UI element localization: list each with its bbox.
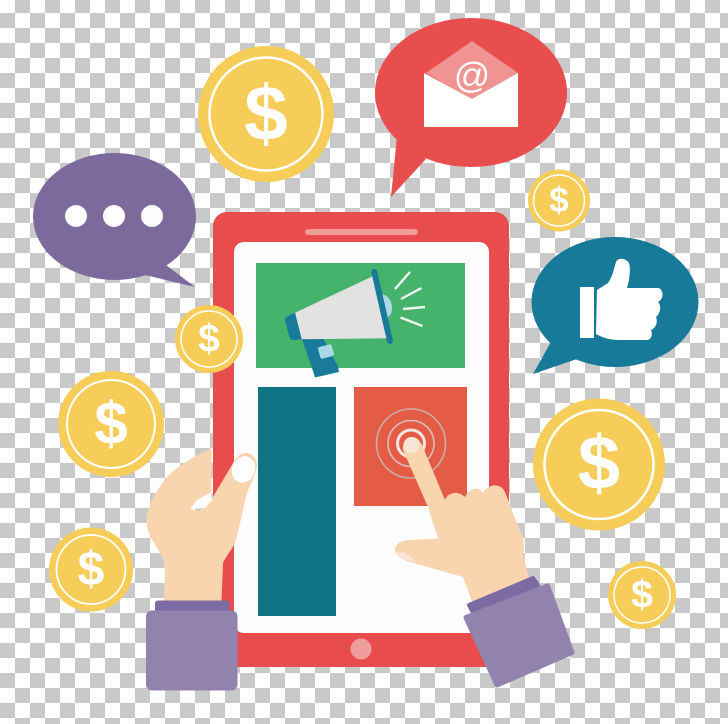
- tablet: [213, 212, 509, 667]
- coin: large right: $: [578, 421, 620, 506]
- coin: bottom left: [49, 528, 133, 612]
- speech bubble: red with email envelope: @: [454, 54, 490, 96]
- coin: bottom right: $: [631, 574, 653, 616]
- speech bubble: purple with dots: [33, 153, 196, 287]
- right hand pointing: [395, 437, 572, 685]
- red tile: [354, 387, 467, 506]
- coin: large right: [533, 398, 665, 530]
- home button: [350, 638, 372, 660]
- left cuff: [155, 600, 230, 614]
- speaker slot: [305, 229, 418, 235]
- icon: megaphone: [285, 272, 425, 378]
- index fingertip: [404, 437, 420, 453]
- coin: bottom left: $: [78, 543, 105, 596]
- left sleeve: [146, 610, 238, 690]
- right sleeve: [466, 586, 572, 685]
- thumb nail: [396, 552, 416, 562]
- thumbnail: [228, 453, 259, 486]
- coin: medium left: [58, 371, 164, 477]
- right cuff: [469, 578, 538, 611]
- coin: small top right: [528, 170, 590, 232]
- coin: small left, overlapping the tablet: $: [198, 318, 220, 360]
- coin: large top: $: [244, 69, 288, 157]
- screen: [234, 242, 489, 633]
- speech bubble: teal with thumbs up: [532, 237, 698, 374]
- coin: small left, overlapping the tablet: [175, 305, 243, 373]
- icon: touch rings: [376, 409, 446, 478]
- coin: bottom right: [608, 561, 676, 629]
- coin: large top: [198, 46, 334, 182]
- teal column: [258, 387, 336, 616]
- coin: medium left: $: [94, 390, 128, 457]
- speech bubble: red with email envelope: [375, 18, 567, 197]
- green banner: [256, 263, 465, 368]
- coin: small top right: $: [549, 181, 569, 220]
- left hand holding tablet: [146, 448, 259, 690]
